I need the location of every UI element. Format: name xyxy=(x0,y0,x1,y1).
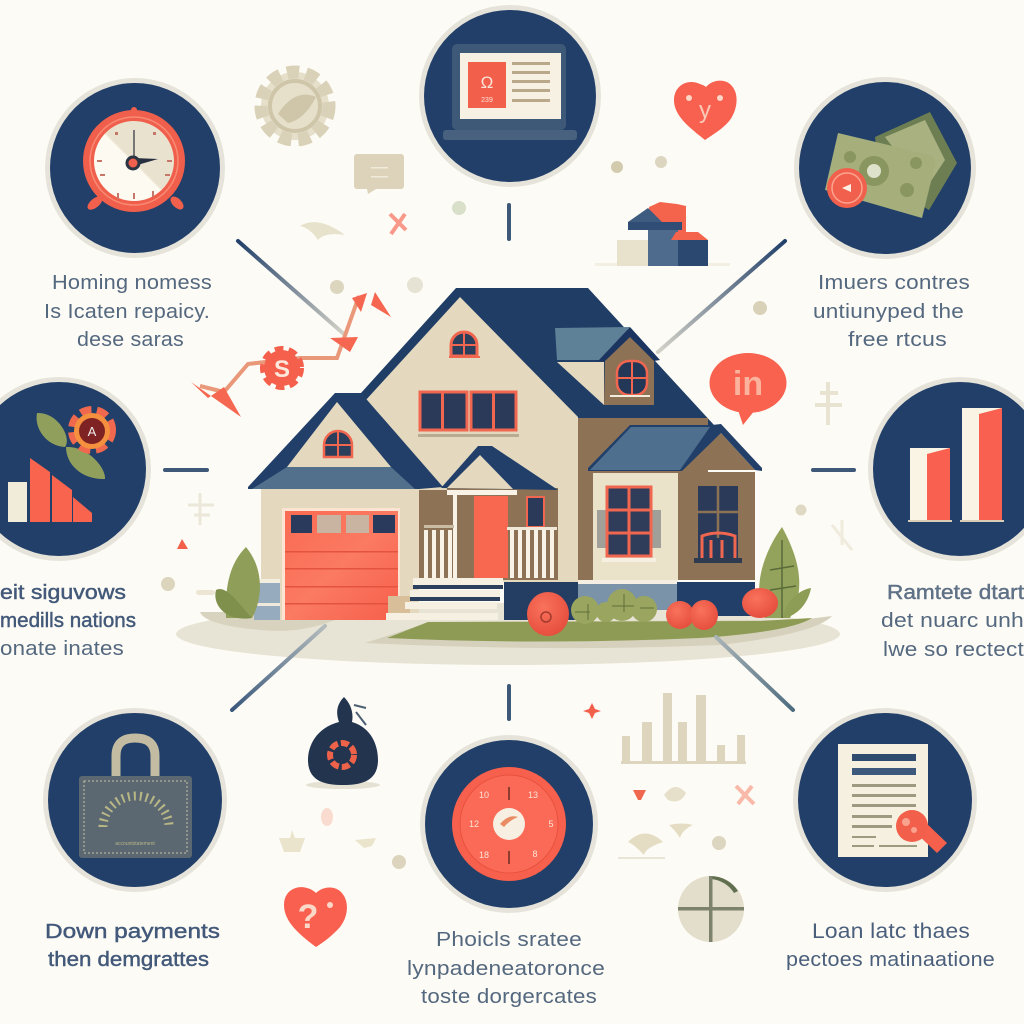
icon: coral heart bottom xyxy=(284,887,347,947)
text: middle right xyxy=(881,581,1024,661)
panel: rising bars xyxy=(868,377,1024,561)
brown side wall xyxy=(578,418,594,582)
decorative dots and marks xyxy=(161,156,852,869)
text: top left xyxy=(44,272,212,351)
icon: quartered ball xyxy=(678,876,744,942)
main roof xyxy=(361,288,714,440)
icon: coral heart top xyxy=(674,81,737,140)
icon: coral dial: 13 xyxy=(528,790,538,800)
main wall xyxy=(365,297,578,582)
attic window xyxy=(449,332,480,358)
icon: money bag xyxy=(306,697,380,789)
tomatoes and bushes xyxy=(527,588,778,636)
text: top right: Imuers contres xyxy=(818,272,970,294)
garage wing xyxy=(248,393,449,620)
text: middle right: Ramtete dtart xyxy=(887,581,1024,604)
icon: laptop: Ω xyxy=(481,73,493,92)
panel: money xyxy=(794,77,976,259)
icon: coral arrow chart with dollar gear: S xyxy=(274,356,290,383)
text: middle right: lwe so rectect xyxy=(883,639,1024,661)
icon: coral arrow chart with dollar gear xyxy=(191,292,391,417)
icon: document with stamp xyxy=(838,744,947,857)
porch xyxy=(386,446,578,620)
panel: laptop xyxy=(419,5,601,187)
text: top right: untiunyped the xyxy=(813,301,964,323)
text: middle left: onate inates xyxy=(0,638,124,660)
icon: coral dial: 8 xyxy=(532,849,538,859)
icon: coral heart bottom: ? xyxy=(298,898,318,936)
icon: coral dial: 18 xyxy=(479,850,489,860)
panel: dial xyxy=(420,735,598,913)
panel: loan document xyxy=(793,708,977,892)
window: brown wall xyxy=(694,486,742,563)
icon: tan speech box xyxy=(354,154,404,194)
icon: coral dial: 12 xyxy=(469,819,479,829)
icon: banknotes and seal xyxy=(825,112,957,218)
icon: two bars xyxy=(908,408,1004,522)
text: middle left: medills nations xyxy=(0,609,136,632)
right wing xyxy=(578,424,762,616)
text: bottom left xyxy=(45,920,220,971)
text: bottom right xyxy=(786,920,995,971)
text: bottom center: lynpadeneatoronce xyxy=(407,958,605,980)
text: bottom right: Loan latc thaes xyxy=(812,920,970,943)
bar chart: tan xyxy=(621,693,746,764)
icon: alarm clock xyxy=(83,107,186,212)
icon: coral speech bubble xyxy=(710,353,786,425)
icon: coral dial xyxy=(452,767,566,881)
shrub right xyxy=(759,527,811,618)
icon: bars, gear and leaves xyxy=(8,410,112,522)
text: top left: dese saras xyxy=(77,329,184,351)
text: top right: free rtcus xyxy=(848,329,947,351)
shrub left xyxy=(215,547,260,619)
icon: coral heart top: y xyxy=(699,97,711,124)
text: middle left: eit siguvows xyxy=(0,581,126,604)
house illustration xyxy=(176,288,840,665)
icon: padlock: accountstatement xyxy=(115,841,155,847)
text: top left: Homing nomess xyxy=(52,272,212,294)
connector lines xyxy=(165,205,854,719)
text: bottom center: toste dorgercates xyxy=(421,986,597,1008)
connector lines over ground xyxy=(232,626,793,710)
garage door xyxy=(282,508,400,620)
icon: small house blocks xyxy=(595,202,730,266)
icon: tan gear xyxy=(261,72,329,140)
upper windows xyxy=(418,392,519,437)
ground ellipse xyxy=(176,603,840,665)
icon: padlock xyxy=(79,738,192,858)
text: bottom center xyxy=(407,929,605,1008)
icon: laptop: 239 xyxy=(481,97,493,104)
icon: coral speech bubble: in xyxy=(733,365,763,403)
icon: coral dial: 5 xyxy=(548,819,554,829)
text: middle left xyxy=(0,581,136,660)
text: bottom left: Down payments xyxy=(45,920,220,943)
text: bottom right: pectoes matinaatione xyxy=(786,949,995,971)
panel: padlock xyxy=(43,708,227,892)
window: shuttered xyxy=(597,487,661,562)
dormer xyxy=(555,327,660,405)
panel: clock xyxy=(45,78,225,258)
icon: coral dial: 10 xyxy=(479,790,489,800)
icon: bars, gear and leaves: A xyxy=(88,424,97,439)
text: middle right: det nuarc unh xyxy=(881,610,1024,632)
text: bottom center: Phoicls sratee xyxy=(436,929,582,951)
text: top left: Is Icaten repaicy. xyxy=(44,301,210,323)
icon: laptop xyxy=(443,44,577,140)
text: bottom left: then demgrattes xyxy=(48,948,209,971)
panel: falling chart xyxy=(0,377,151,561)
text: top right xyxy=(813,272,970,351)
